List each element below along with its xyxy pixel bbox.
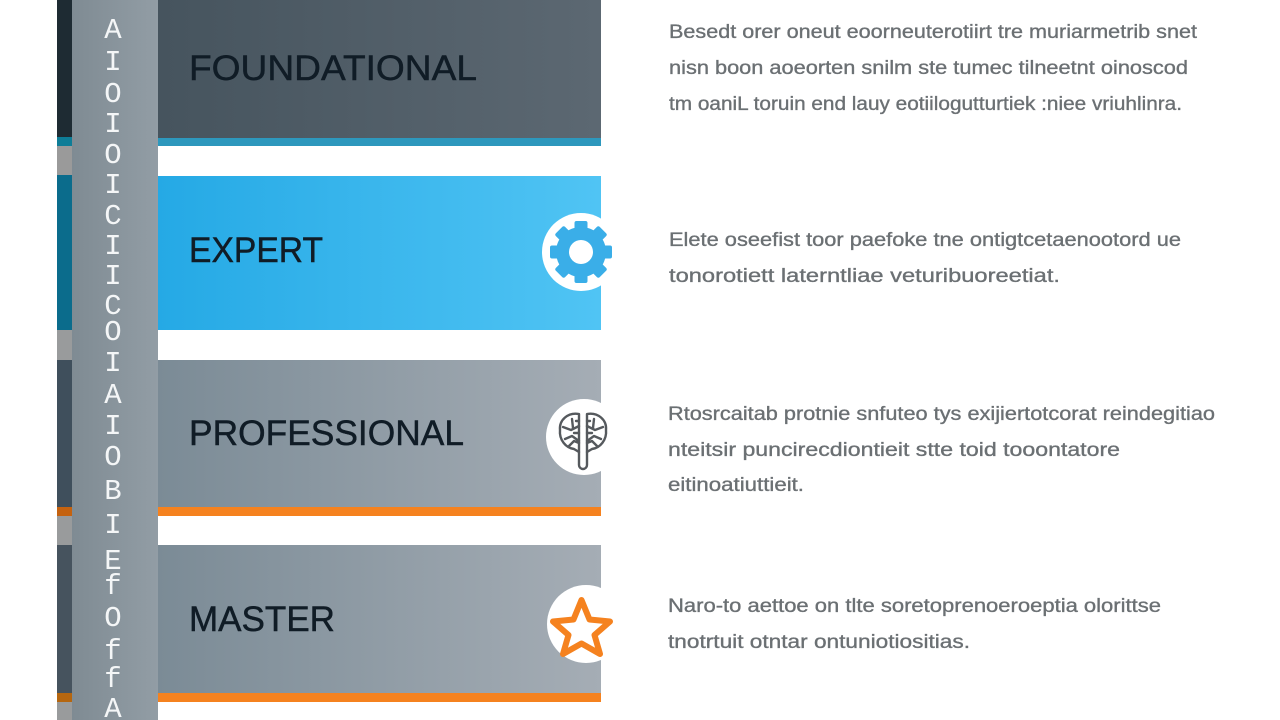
vertical sidebar with letters: I bbox=[104, 108, 122, 141]
vertical sidebar with letters bbox=[72, 0, 158, 720]
text block: foundational description bbox=[669, 21, 1198, 115]
text block: professional description: nteitsir puncirecdiontieit stte toid tooontatore bbox=[668, 439, 1120, 461]
icon: gear bbox=[542, 213, 620, 291]
heading: expert: EXPERT bbox=[189, 231, 323, 270]
vertical sidebar with letters: O bbox=[104, 316, 122, 349]
heading: foundational: FOUNDATIONAL bbox=[189, 49, 477, 88]
icon: star bbox=[547, 585, 625, 663]
vertical sidebar with letters: E bbox=[104, 545, 122, 578]
panel: expert bbox=[158, 176, 601, 330]
vertical sidebar with letters: f bbox=[104, 635, 122, 668]
vertical sidebar with letters: f bbox=[104, 570, 122, 603]
text block: expert description bbox=[669, 229, 1181, 287]
text block: professional description: eitinoatiuttieit. bbox=[668, 474, 804, 496]
vertical sidebar with letters: I bbox=[104, 509, 122, 542]
vertical sidebar with letters: C bbox=[104, 290, 122, 323]
vertical sidebar with letters: f bbox=[104, 663, 122, 696]
vertical sidebar with letters: I bbox=[104, 347, 122, 380]
text block: foundational description: tm oaniL toruin end lauy eotiilogutturtiek :niee vriuhlinra. bbox=[669, 93, 1182, 115]
vertical sidebar with letters: C bbox=[104, 200, 122, 233]
vertical sidebar with letters: I bbox=[104, 410, 122, 443]
text block: foundational description: nisn boon aoeorten snilm ste tumec tilneetnt oinoscod bbox=[669, 57, 1188, 79]
panel: master bbox=[158, 545, 601, 702]
panel: foundational bbox=[158, 0, 601, 146]
text block: master description: tnotrtuit otntar ontuniotiositias. bbox=[668, 631, 970, 653]
text block: expert description: Elete oseefist toor paefoke tne ontigtcetaenootord ue bbox=[669, 229, 1181, 251]
text block: master description bbox=[668, 595, 1161, 653]
icon: brain bbox=[546, 399, 622, 475]
vertical sidebar with letters: I bbox=[104, 46, 122, 79]
vertical sidebar with letters: B bbox=[104, 475, 122, 508]
vertical sidebar with letters: A bbox=[104, 379, 122, 412]
vertical sidebar with letters: O bbox=[104, 602, 122, 635]
vertical sidebar with letters: I bbox=[104, 230, 122, 263]
panel: professional bbox=[158, 360, 601, 516]
left edge strip bbox=[57, 0, 72, 720]
vertical sidebar with letters: O bbox=[104, 78, 122, 111]
vertical sidebar with letters: O bbox=[104, 139, 122, 172]
text block: professional description: Rtosrcaitab protnie snfuteo tys exijiertotcorat reindegitiao bbox=[668, 403, 1215, 425]
text block: professional description bbox=[668, 403, 1215, 496]
vertical sidebar with letters: I bbox=[104, 260, 122, 293]
text block: foundational description: Besedt orer oneut eoorneuterotiirt tre muriarmetrib snet bbox=[669, 21, 1198, 43]
heading: professional: PROFESSIONAL bbox=[189, 414, 464, 453]
vertical sidebar with letters: O bbox=[104, 441, 122, 474]
text block: master description: Naro-to aettoe on tlte soretoprenoeroeptia olorittse bbox=[668, 595, 1161, 617]
vertical sidebar with letters: I bbox=[104, 169, 122, 202]
heading: master: MASTER bbox=[189, 600, 335, 639]
vertical sidebar with letters: A bbox=[104, 14, 122, 47]
text block: expert description: tonorotiett laterntliae veturibuoreetiat. bbox=[669, 265, 1060, 287]
